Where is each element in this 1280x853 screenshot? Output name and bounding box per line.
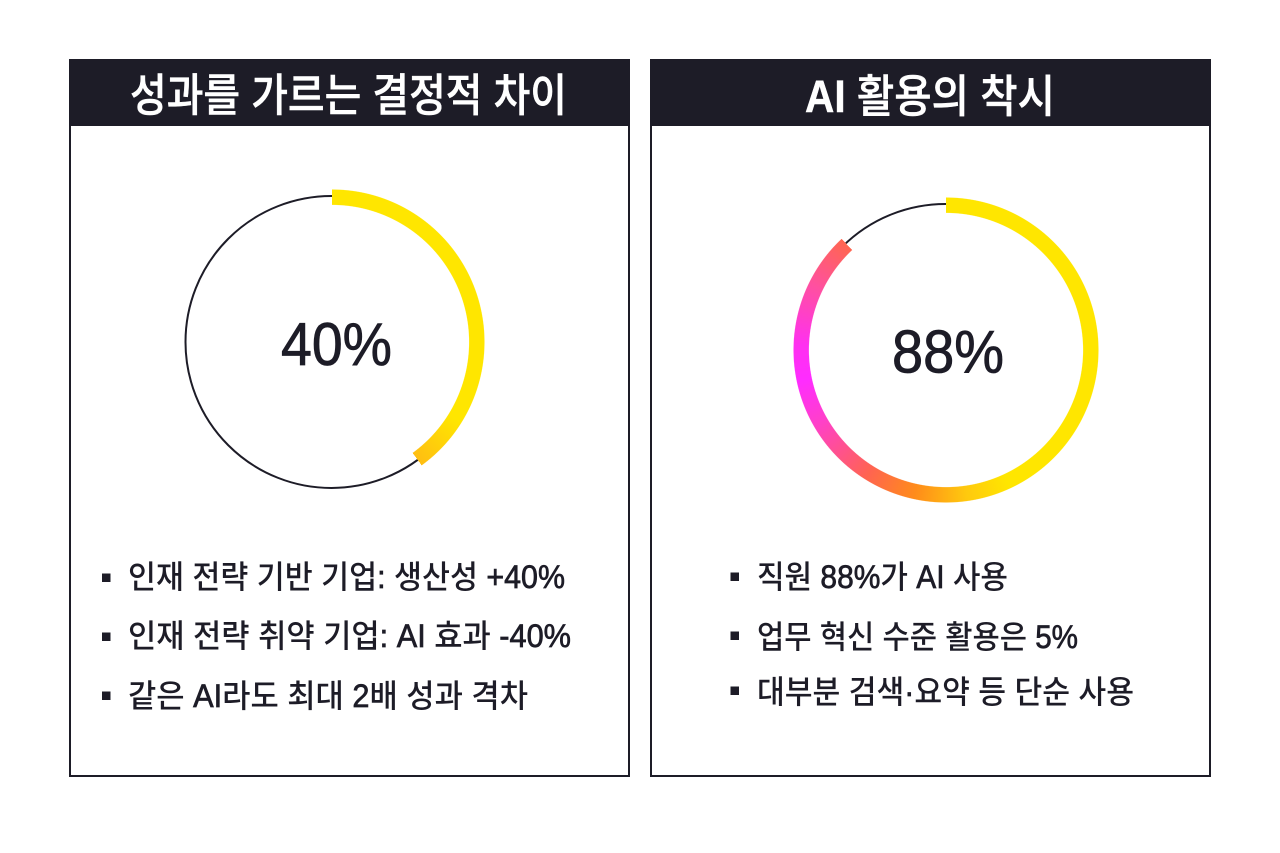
panel frame xyxy=(651,60,1210,776)
bullet list: 같은 AI라도 최대 2배 성과 격차 xyxy=(128,678,528,714)
bullet list: 대부분 검색·요약 등 단순 사용 xyxy=(757,674,1134,710)
donut chart: 40% xyxy=(178,189,484,495)
panel: AI usage illusion xyxy=(650,59,1211,776)
bullet list xyxy=(730,559,1134,710)
panel header xyxy=(650,59,1211,126)
bullet list: 인재 전략 취약 기업: AI 효과 -40% xyxy=(128,618,571,654)
donut chart: 88% xyxy=(792,197,1098,503)
panel header: 성과를 가르는 결정적 차이 xyxy=(130,70,567,121)
bullet list: 업무 혁신 수준 활용은 5% xyxy=(757,619,1078,655)
bullet list xyxy=(102,559,571,714)
panel header: AI 활용의 착시 xyxy=(805,71,1055,122)
bullet list: 인재 전략 기반 기업: 생산성 +40% xyxy=(128,559,565,595)
bullet list: 직원 88%가 AI 사용 xyxy=(757,559,1008,595)
panel: performance gap xyxy=(69,59,630,776)
panel header xyxy=(69,59,630,126)
panel frame xyxy=(70,60,629,776)
donut chart: 88%: 88% xyxy=(892,318,1004,386)
donut chart: 40%: 40% xyxy=(281,311,392,378)
